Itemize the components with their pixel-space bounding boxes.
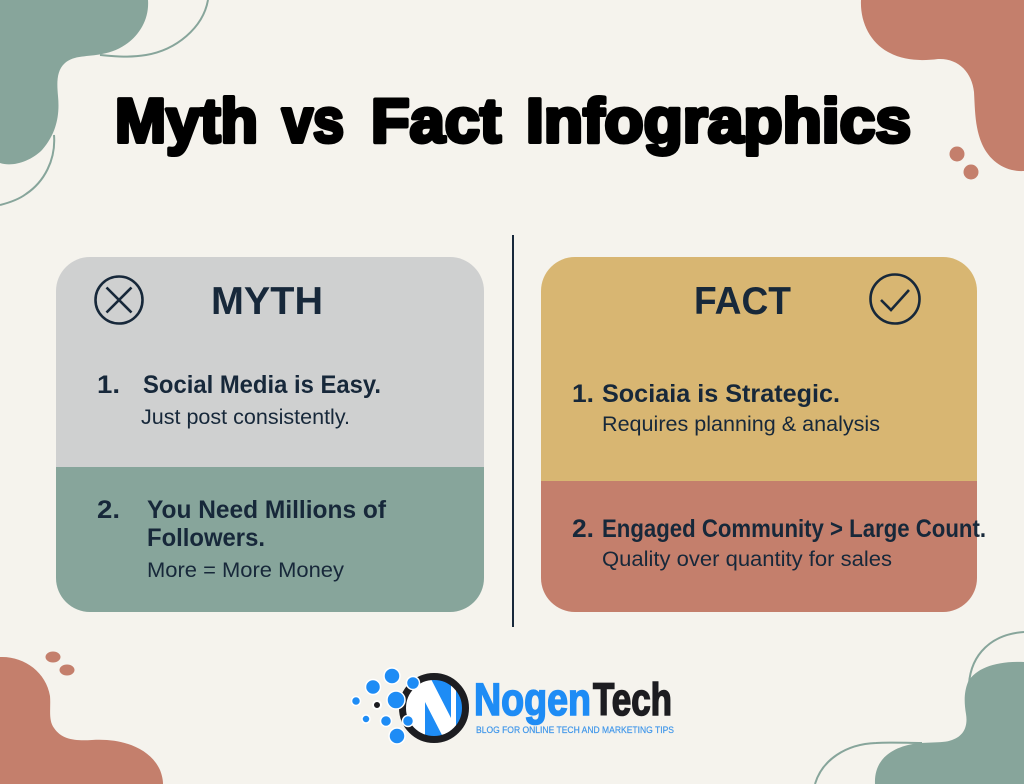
decorative blob: bottom left <box>0 652 163 784</box>
fact item 1: 1. <box>572 380 594 408</box>
fact item 1 <box>572 380 880 436</box>
decorative blob: top left <box>0 0 208 205</box>
myth item 2: You Need Millions of <box>147 496 387 524</box>
title: Fact <box>371 87 501 156</box>
logo wordmark: Tech <box>593 674 672 725</box>
logo tagline: BLOG FOR ONLINE TECH AND MARKETING TIPS <box>476 725 674 736</box>
fact item 2 <box>572 515 986 571</box>
icon: cross in circle <box>96 276 142 324</box>
myth item 1: Just post consistently. <box>141 405 350 429</box>
divider <box>512 235 514 627</box>
fact item 2: Quality over quantity for sales <box>602 547 892 571</box>
logo wordmark: Nogen <box>474 674 591 725</box>
decorative blob: bottom right <box>815 632 1024 784</box>
fact item 1: Requires planning & analysis <box>602 412 880 436</box>
panel: fact <box>541 257 986 612</box>
fact item 1: Sociaia is Strategic. <box>602 380 840 408</box>
myth item 1: Social Media is Easy. <box>143 371 381 399</box>
panel: myth <box>56 257 484 612</box>
title: Myth <box>115 87 258 156</box>
title <box>115 87 911 156</box>
myth heading: MYTH <box>211 280 323 323</box>
myth item 1: 1. <box>97 371 120 399</box>
icon: check in circle <box>870 274 920 324</box>
myth item 2: More = More Money <box>147 558 344 582</box>
icon: logo dots <box>352 668 420 744</box>
logo: NogenTech <box>352 668 674 744</box>
icon: logo ring with N <box>402 676 466 740</box>
myth item 2 <box>97 496 387 582</box>
myth item 2: Followers. <box>147 524 265 552</box>
myth item 1 <box>97 371 381 429</box>
fact heading: FACT <box>694 280 791 323</box>
decorative blob: top right <box>861 0 1024 180</box>
title: Infographics <box>526 87 911 156</box>
fact item 2: 2. <box>572 515 594 543</box>
title: vs <box>282 87 344 156</box>
fact item 2: Engaged Community > Large Count. <box>602 515 986 543</box>
myth item 2: 2. <box>97 496 120 524</box>
